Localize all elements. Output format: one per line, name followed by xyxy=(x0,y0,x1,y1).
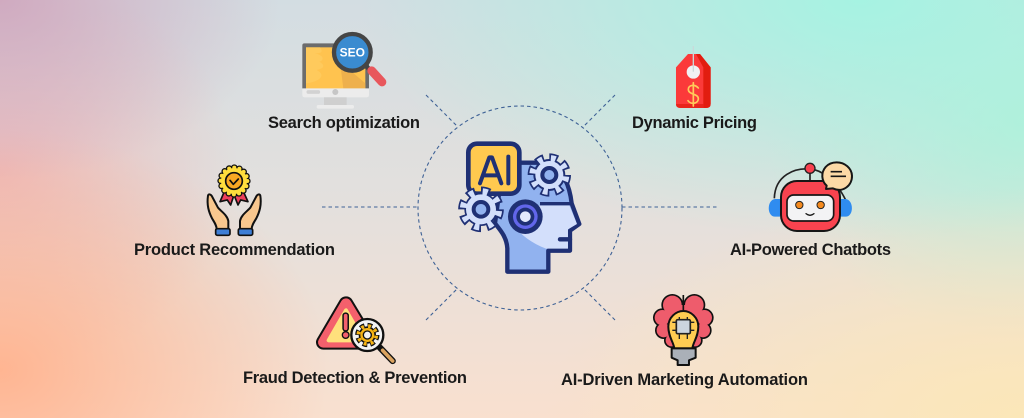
icon: hands holding award badge xyxy=(208,168,261,235)
icon: SEO monitor and magnifier: SEO xyxy=(340,46,365,60)
icon: warning triangle with magnifier xyxy=(323,304,393,361)
label: Search optimization: Search optimization xyxy=(268,114,420,132)
label: AI-Powered Chatbots: AI-Powered Chatbots xyxy=(730,241,891,259)
label: Product Recommendation: Product Recommendation xyxy=(134,241,335,259)
label: AI-Driven Marketing Automation: AI-Driven Marketing Automation xyxy=(561,371,808,389)
icon: AI head with gears xyxy=(462,144,579,272)
icon: brain light bulb xyxy=(653,294,714,365)
label: Fraud Detection & Prevention: Fraud Detection & Prevention xyxy=(243,369,467,387)
label: Dynamic Pricing: Dynamic Pricing xyxy=(632,114,757,132)
icon: robot chatbot xyxy=(769,162,852,231)
icon: SEO monitor and magnifier xyxy=(302,34,382,109)
icon: red price tag xyxy=(676,46,711,108)
